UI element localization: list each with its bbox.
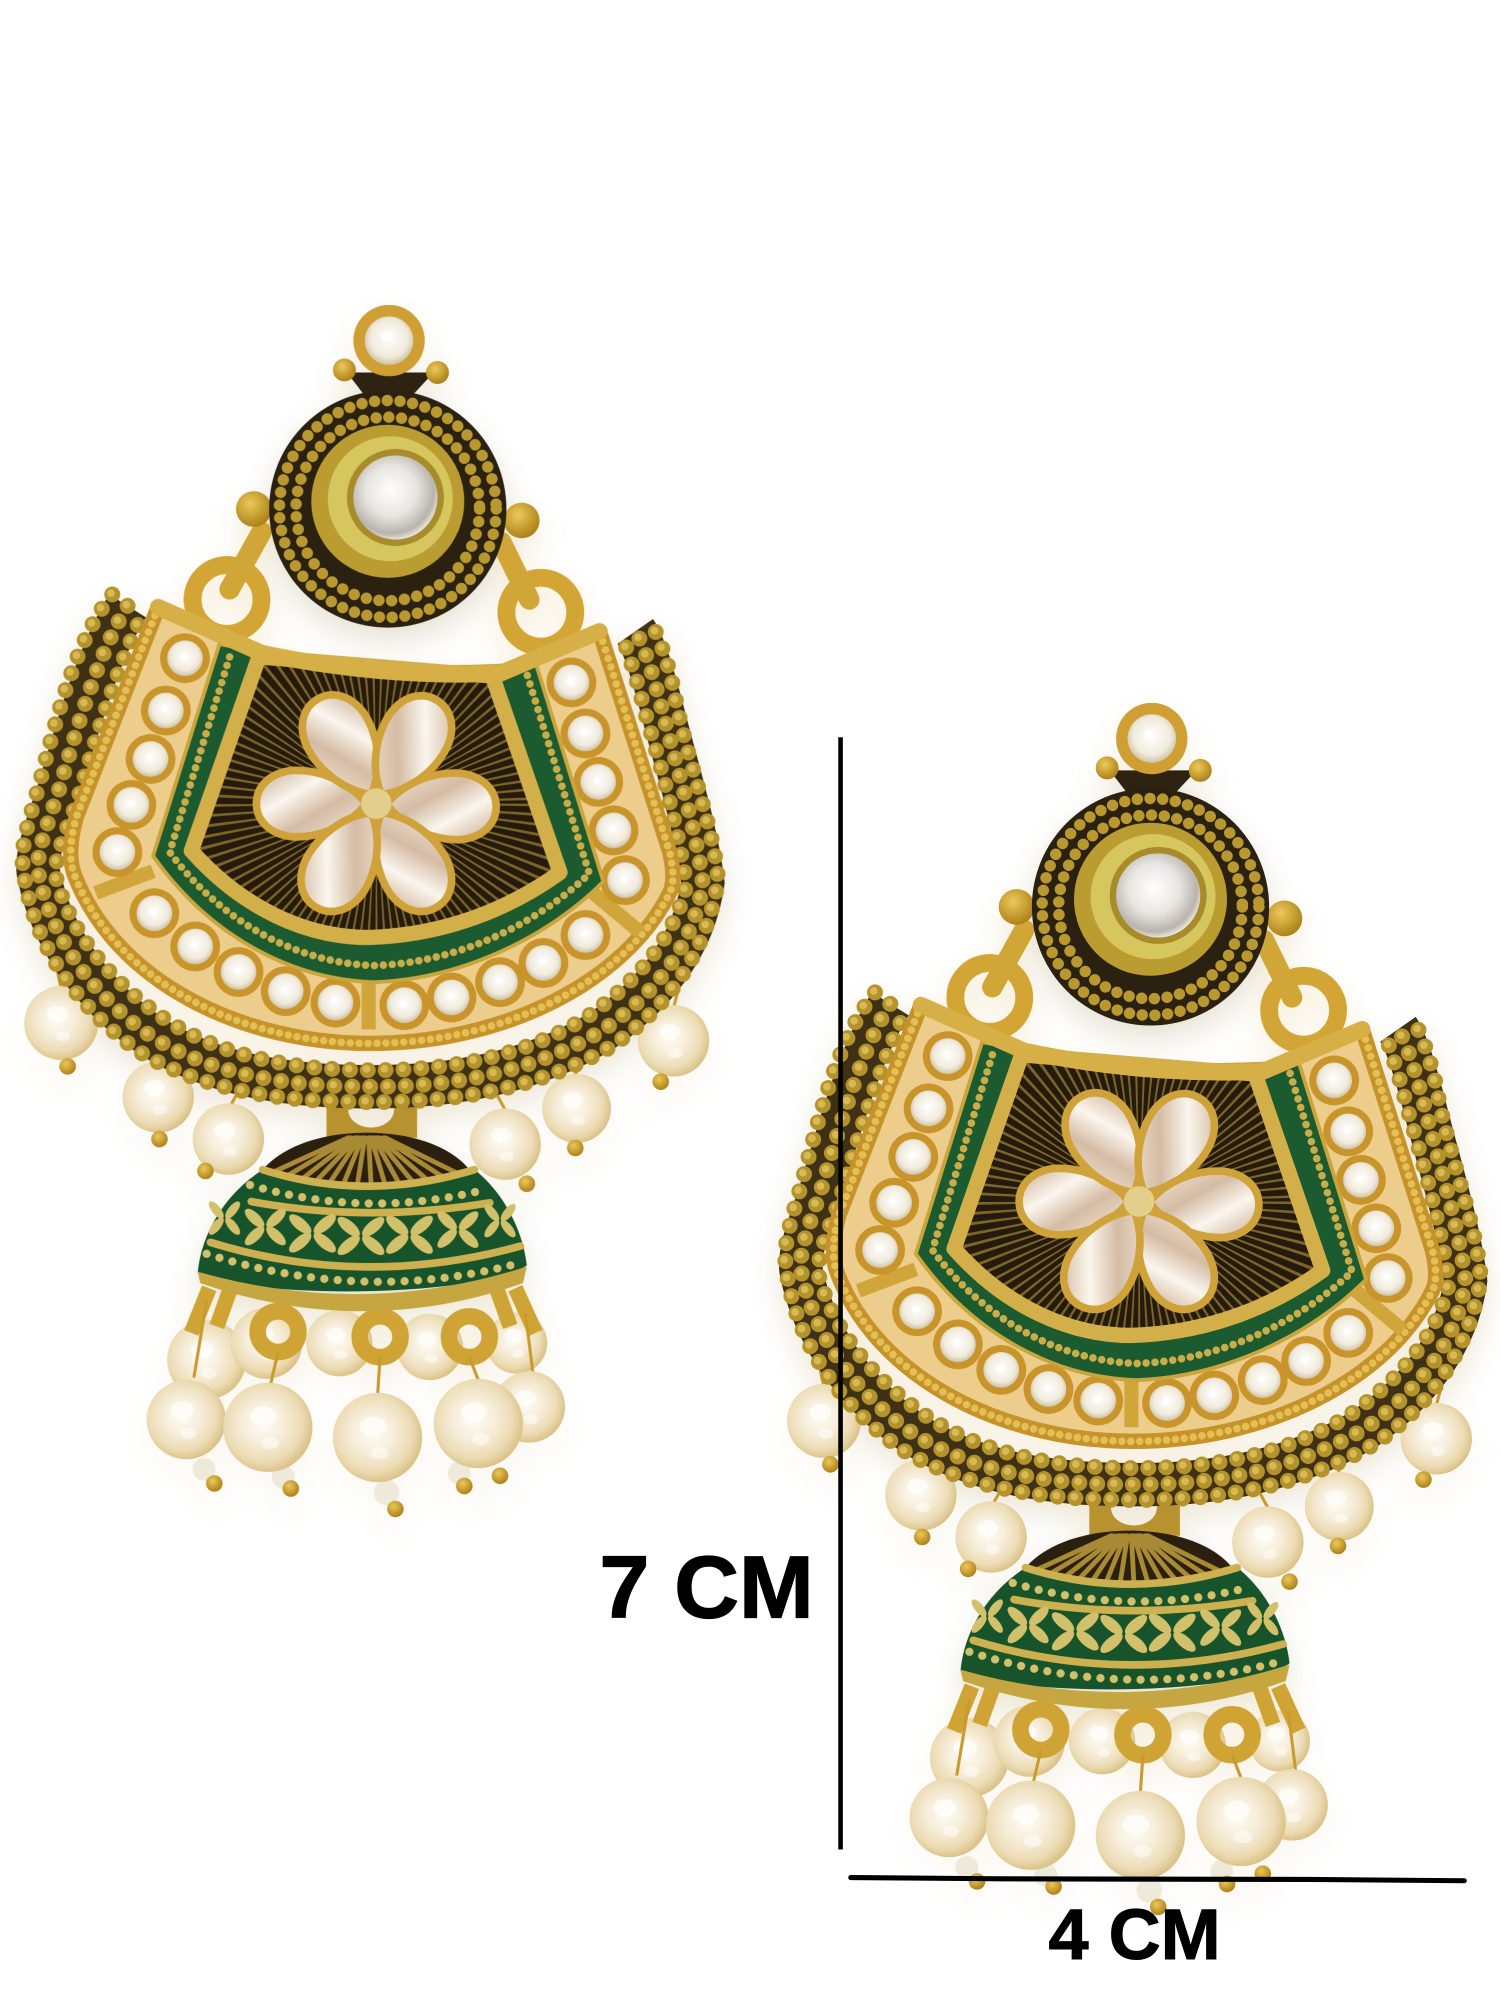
dome dot rows (207, 1185, 520, 1282)
top gold strip (158, 607, 599, 674)
top pearl setting (333, 305, 449, 411)
jhumka back pearls (167, 1307, 547, 1399)
green enamel dome (198, 1170, 527, 1291)
connector loops (193, 565, 575, 647)
seated pearl rows (92, 633, 650, 1030)
height measurement line (838, 737, 843, 1849)
kundan flower (256, 683, 497, 924)
jhumka stem (327, 1092, 417, 1138)
leaf pattern band (207, 1198, 518, 1258)
dangling pearls (24, 944, 709, 1192)
gold bands (210, 1170, 520, 1267)
height label: 7 CM (599, 1537, 814, 1636)
width measurement line (851, 1878, 1464, 1881)
outer bead band (21, 593, 718, 1102)
gold openwork frame (71, 607, 673, 1043)
kundan medallion (269, 390, 506, 628)
dome rim (198, 1267, 527, 1311)
earring: left view (21, 305, 718, 1517)
jhumka dome (198, 1133, 527, 1311)
jhumka front pearls (147, 1301, 565, 1517)
jhumka side hangers and rings (191, 1288, 536, 1357)
capsule links and side balls (230, 491, 540, 599)
green enamel panel (153, 644, 603, 982)
width label: 4 CM (1048, 1895, 1221, 1975)
dark centre with rays (191, 657, 560, 938)
ribbed cap (263, 1133, 469, 1186)
earring: right view with measurements (784, 703, 1481, 1915)
